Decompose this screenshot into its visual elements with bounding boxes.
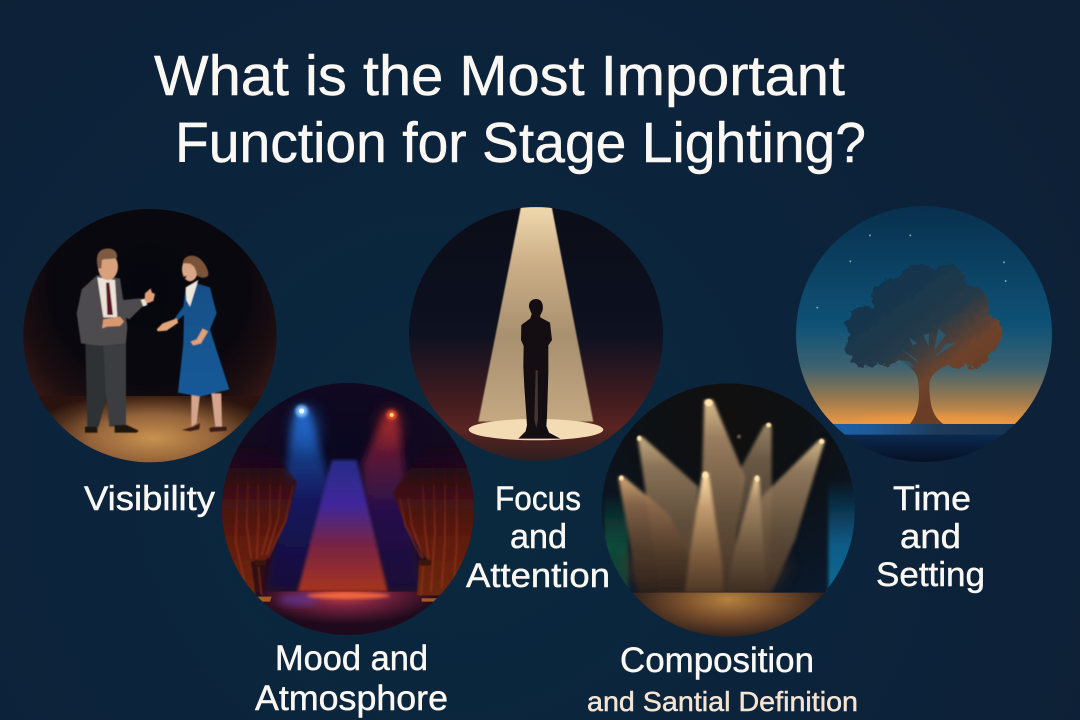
panel: composition and spatial definition	[595, 380, 860, 640]
lake	[833, 424, 1015, 435]
woman	[157, 256, 229, 432]
lamp glows	[619, 399, 824, 482]
side curtains	[604, 480, 857, 590]
light beams	[618, 400, 825, 592]
centre beam	[298, 460, 388, 592]
stage floor	[632, 592, 824, 637]
label: mood and atmosphere	[255, 639, 448, 718]
curtains	[222, 457, 474, 596]
label: focus and attention: and	[510, 518, 567, 556]
blue beam	[265, 408, 330, 592]
title: Function for Stage Lighting?	[175, 111, 866, 175]
ambient haze	[625, 533, 785, 600]
tree	[846, 264, 1002, 424]
label: composition and spatial definition	[587, 641, 858, 717]
panel: visibility	[23, 209, 277, 462]
light pool	[469, 419, 603, 440]
spotlight beam	[478, 207, 593, 422]
label: time and setting: and	[900, 518, 961, 556]
man	[77, 249, 155, 433]
label: mood and atmosphere: Mood and	[275, 639, 428, 678]
red beam	[362, 412, 422, 592]
floor	[255, 592, 440, 635]
label: composition and spatial definition: Composition	[620, 641, 814, 680]
label: time and setting	[876, 480, 985, 594]
branch gaps	[897, 328, 955, 368]
title	[154, 44, 866, 175]
stars	[816, 234, 1007, 309]
title: What is the Most Important	[154, 44, 845, 108]
label: focus and attention: Focus	[495, 480, 581, 518]
ground	[845, 434, 1002, 462]
silhouette	[518, 299, 560, 439]
label: focus and attention: Attention	[466, 557, 610, 595]
label: time and setting: Time	[893, 480, 971, 518]
panel: focus and attention	[405, 200, 670, 465]
label: time and setting: Setting	[876, 556, 985, 594]
label: visibility: Visibility	[84, 480, 215, 518]
label: focus and attention	[466, 480, 610, 595]
lights	[293, 405, 401, 450]
label: mood and atmosphere: Atmosphore	[255, 679, 448, 718]
panel: time and setting	[790, 200, 1060, 465]
label: composition and spatial definition: and Santial Definition	[587, 686, 858, 717]
panel: mood and atmosphere	[215, 378, 480, 635]
